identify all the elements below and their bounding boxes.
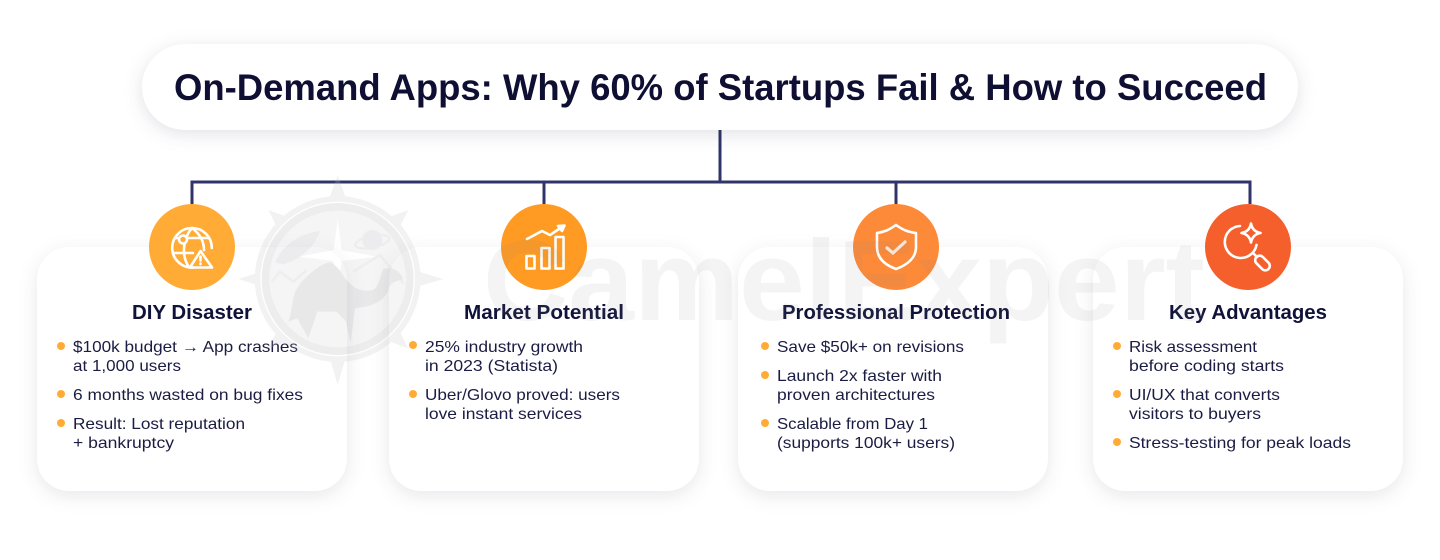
icon: shield with check: [853, 204, 939, 290]
connector lines: [192, 130, 1250, 204]
heading: DIY Disaster: DIY Disaster: [132, 301, 252, 324]
panel: Market Potential: [389, 247, 699, 491]
panel: Professional Protection: [738, 247, 1048, 491]
bullet list: Key Advantages: visitors to buyers: [1129, 406, 1261, 423]
bullet list: Market Potential: in 2023 (Statista): [425, 358, 558, 375]
title pill: [142, 44, 1298, 130]
bullet list: DIY Disaster: [57, 339, 303, 452]
bullet list: Key Advantages: Risk assessment: [1129, 339, 1258, 356]
bullet list: DIY Disaster: 6 months wasted on bug fixes: [73, 387, 303, 404]
icon: growth chart: [501, 204, 587, 290]
watermark: CamelExpert: CamelExpert: [483, 218, 1205, 345]
bullet list: Key Advantages: [1113, 339, 1351, 452]
bullet list: DIY Disaster: at 1,000 users: [73, 358, 181, 375]
heading: Key Advantages: Key Advantages: [1169, 301, 1327, 324]
bullet list: Professional Protection: [761, 339, 964, 452]
bullet list: Key Advantages: before coding starts: [1129, 358, 1284, 375]
heading: Market Potential: Market Potential: [464, 301, 624, 324]
bullet list: DIY Disaster: $100k budget → App crashes: [73, 339, 298, 356]
bullet list: Professional Protection: Save $50k+ on revisions: [777, 339, 964, 356]
bullet list: Professional Protection: (supports 100k+ users): [777, 435, 955, 452]
bullet list: Market Potential: 25% industry growth: [425, 339, 583, 356]
bullet list: Key Advantages: UI/UX that converts: [1129, 387, 1280, 404]
bullet list: Market Potential: [409, 339, 620, 423]
title: On-Demand Apps: Why 60% of Startups Fail & How to Succeed: [174, 66, 1267, 108]
bullet list: Key Advantages: Stress-testing for peak loads: [1129, 435, 1351, 452]
bullet list: Professional Protection: Scalable from Day 1: [777, 416, 928, 433]
watermark: compass badge: [238, 175, 443, 385]
bullet list: Market Potential: Uber/Glovo proved: users: [425, 387, 620, 404]
panel: DIY Disaster: [37, 247, 347, 491]
heading: Professional Protection: Professional Protection: [782, 301, 1010, 324]
bullet list: DIY Disaster: + bankruptcy: [73, 435, 174, 452]
bullet list: Market Potential: love instant services: [425, 406, 582, 423]
icon: globe with warning: [149, 204, 235, 290]
icon: magnifier with sparkle: [1205, 204, 1291, 290]
bullet list: Professional Protection: Launch 2x faster with: [777, 368, 942, 385]
bullet list: DIY Disaster: Result: Lost reputation: [73, 416, 245, 433]
bullet list: Professional Protection: proven architectures: [777, 387, 935, 404]
panel: Key Advantages: [1093, 247, 1403, 491]
